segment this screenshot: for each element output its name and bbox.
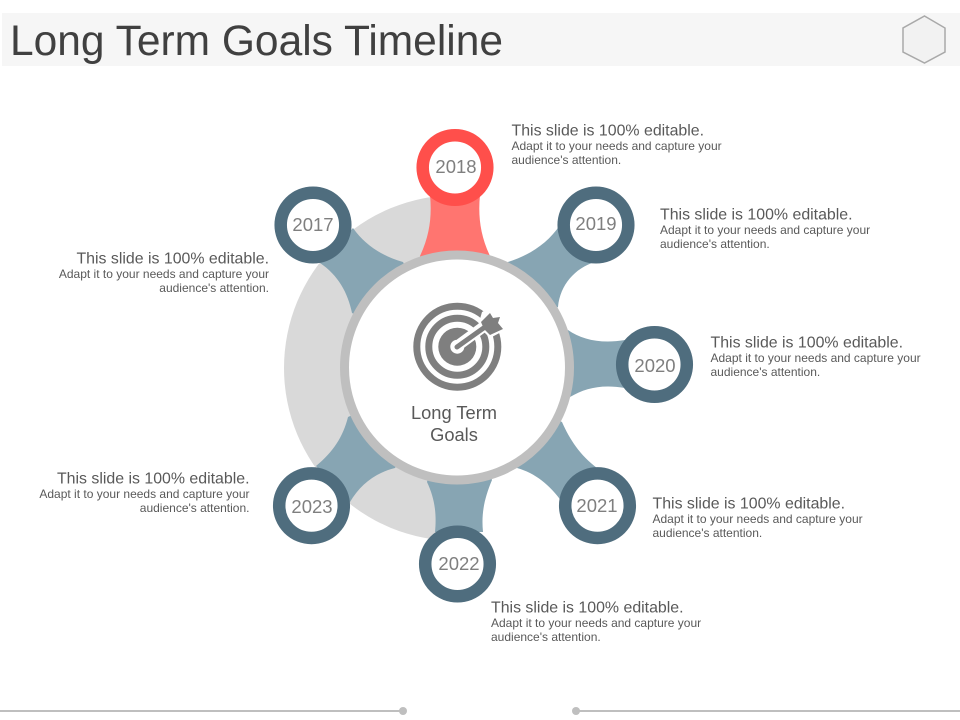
icon: hexagon [903,16,945,63]
text block: 2022: audience's attention. [491,630,601,644]
text block: 2017 [59,250,269,295]
text block: 2017: Adapt it to your needs and capture your [59,267,269,281]
text block: 2020: Adapt it to your needs and capture your [710,351,921,365]
title band [2,13,960,66]
text block: 2020: This slide is 100% editable. [710,334,903,352]
connector: 2021 [457,367,597,502]
connector: 2023 [316,367,457,502]
icon: target with arrow [417,306,507,387]
text block: 2023: This slide is 100% editable. [57,470,250,488]
node: 2018: 2018 [435,156,477,177]
text block: 2019: This slide is 100% editable. [660,206,853,224]
text block: 2020 [710,334,921,379]
text block: 2023 [39,470,250,515]
text block: 2018: This slide is 100% editable. [512,122,704,140]
footer rule: left [0,707,407,715]
node: 2023 [279,473,344,538]
hub label: Long Term [411,402,497,423]
node: 2017 [281,193,345,257]
text block: 2018: audience's attention. [512,153,621,167]
text block: 2023: audience's attention. [140,501,250,515]
connector: 2017 [320,228,457,367]
text block: 2017: audience's attention. [159,281,269,295]
text block: 2021: This slide is 100% editable. [652,496,845,512]
central hub: Goals [430,424,478,445]
node: 2022: 2022 [438,553,480,574]
text block: 2020: audience's attention. [710,365,820,379]
connector arms [316,195,625,532]
text block: 2022: Adapt it to your needs and capture your [491,616,701,630]
connector: 2022 [427,367,492,532]
central hub [344,255,570,480]
text block: 2019: audience's attention. [660,237,770,251]
node: 2017: 2017 [292,214,334,235]
title: Long Term Goals Timeline [10,17,503,65]
text block: 2022: This slide is 100% editable. [491,600,684,616]
node: 2020 [622,332,687,397]
text block: 2018: Adapt it to your needs and capture your [512,139,722,153]
text block: 2022 [491,600,701,644]
node: 2023: 2023 [291,496,333,517]
text block: 2018 [512,122,722,167]
text block: 2017: This slide is 100% editable. [76,250,269,268]
node: 2022 [425,532,490,596]
text block: 2023: Adapt it to your needs and capture your [39,487,250,501]
connector: 2020 [457,330,625,397]
connector: 2018 [420,195,490,367]
text block: 2021: Adapt it to your needs and capture your [652,512,863,526]
text block: 2021: audience's attention. [652,526,762,540]
text block: 2021 [652,496,863,540]
text block: 2019: Adapt it to your needs and capture your [660,223,870,237]
node: 2018 [423,135,487,200]
node: 2019: 2019 [575,213,617,234]
connector: 2019 [457,225,595,367]
text block: 2019 [660,206,870,251]
node: 2021: 2021 [576,495,618,516]
footer rule: right [572,707,960,715]
grey crescent backdrop [284,197,436,538]
node: 2021 [565,473,630,538]
node: 2019 [564,193,628,257]
node: 2020: 2020 [634,355,676,376]
